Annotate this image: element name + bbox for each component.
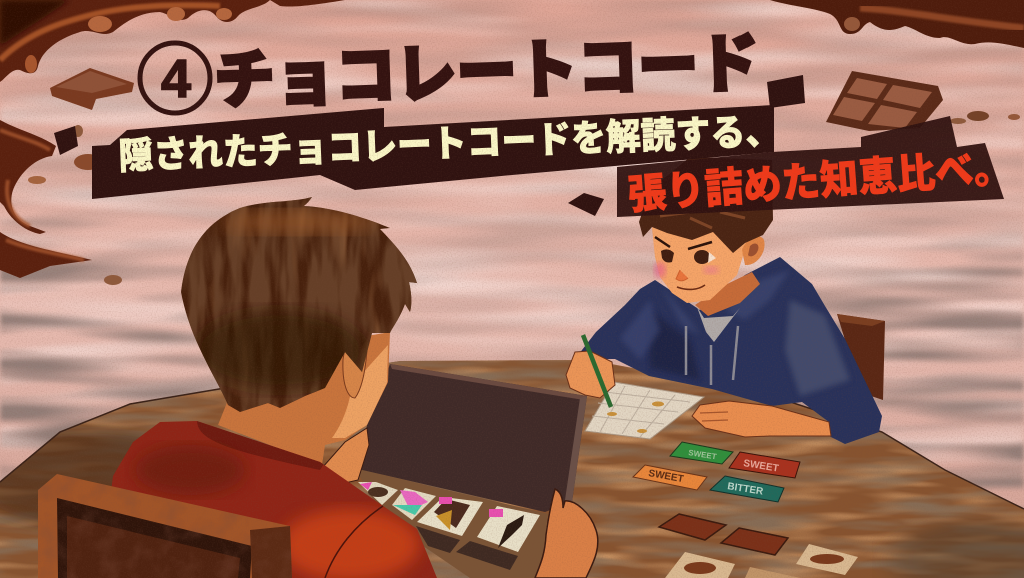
- brown tile 2: [721, 528, 788, 555]
- hair: [639, 157, 773, 253]
- card 4: [477, 506, 540, 552]
- worksheet paper: [585, 382, 704, 439]
- table: [0, 360, 1024, 578]
- fragment left: [54, 126, 78, 155]
- neck and face: [218, 332, 390, 465]
- green tile: [670, 442, 733, 464]
- front boy's left hand with green pencil: [566, 335, 615, 407]
- front boy's chair: [837, 314, 885, 400]
- front boy: [575, 157, 882, 444]
- fragment upper right: [767, 75, 805, 108]
- orange tile: SWEET: [647, 468, 684, 485]
- brown tile 1: [659, 514, 726, 540]
- title text: チョコレートコード: [213, 27, 760, 117]
- hair: [181, 197, 417, 412]
- red tile: [729, 452, 800, 478]
- teal tile: [710, 476, 784, 502]
- card 4 label: [456, 541, 518, 570]
- tan tile 2: [796, 544, 858, 575]
- orange tile: [633, 465, 707, 490]
- subtitle banner 1: [92, 105, 781, 199]
- card 2: [392, 488, 436, 520]
- fragment middle: [568, 193, 604, 216]
- subtitle banner 1 fragments: [54, 75, 805, 216]
- neck: [695, 272, 760, 316]
- game tiles: [633, 442, 858, 578]
- teal tile: BITTER: [727, 481, 765, 498]
- back boy's chair: [30, 470, 300, 578]
- card 3: [417, 497, 483, 536]
- ear: [742, 236, 765, 265]
- back boy's right hand: [535, 489, 598, 578]
- hand at chin: [322, 428, 369, 483]
- title: [140, 27, 760, 117]
- icon: chocolate bar right: [826, 71, 943, 131]
- back boy's screen: [358, 364, 587, 512]
- chocolate drips: top right: [770, 0, 1024, 124]
- back boy: [100, 190, 437, 578]
- chocolate drips: top left and left edge: [0, 0, 345, 285]
- back boy's card tray: [355, 468, 548, 578]
- green tile: SWEET: [688, 448, 717, 461]
- ear: [343, 333, 367, 398]
- red shirt: [100, 421, 437, 578]
- card 3 label: [416, 526, 460, 553]
- tan tile 1: [665, 552, 735, 578]
- t-shirt collar: [697, 307, 740, 342]
- eyes and brows: [655, 237, 712, 249]
- number circle: 4: [161, 49, 191, 109]
- front boy's right arm and hand: [692, 401, 831, 437]
- icon: chocolate piece left: [50, 68, 134, 110]
- card 1: [358, 482, 398, 505]
- mouth: [677, 285, 705, 289]
- face: [652, 215, 752, 303]
- subtitle banner 1: 隠されたチョコレートコードを解読する、: [118, 111, 781, 177]
- red tile: SWEET: [743, 458, 779, 475]
- number circle: [140, 43, 210, 113]
- hoodie: [575, 257, 882, 444]
- tan tile 3: [745, 567, 800, 578]
